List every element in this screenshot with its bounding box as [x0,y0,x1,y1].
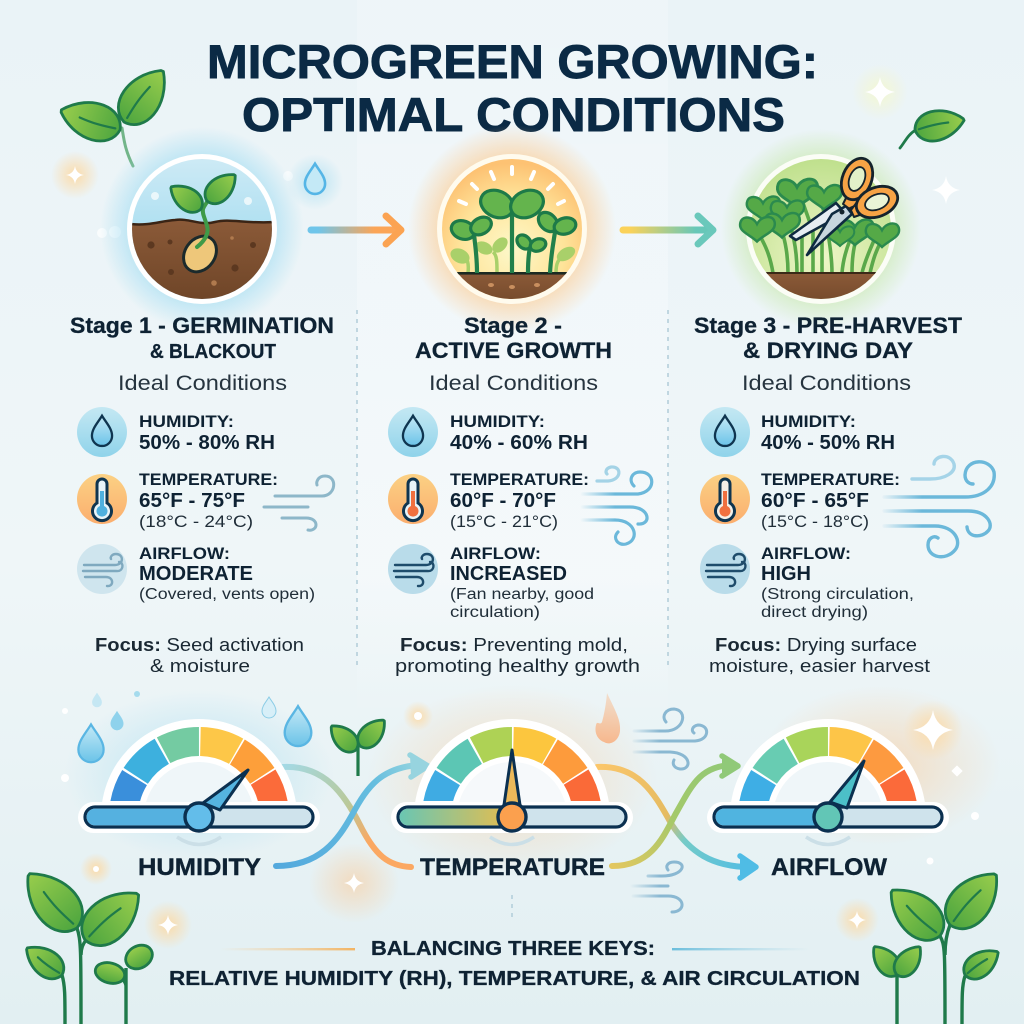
airflow values: circulation) [450,604,540,621]
icon: thermometer [77,474,127,524]
icon: humidity [700,407,750,457]
airflow values [139,544,315,603]
airflow values [450,544,594,621]
airflow values: AIRFLOW: [139,544,230,563]
plants: bottom right [866,861,1011,1024]
temperature values: 60°F - 65°F [761,490,869,512]
focus text [709,635,930,676]
footer rule right [672,948,810,950]
humidity values: HUMIDITY: [450,412,545,431]
icon: top left leaves [55,60,178,166]
subheading: Ideal Conditions [118,372,287,395]
icon: wind decoration [884,456,994,557]
temperature values: TEMPERATURE: [139,470,278,489]
panel: stage 3 [694,313,994,676]
focus text: Focus: Seed activation [95,635,304,655]
sparkles [51,64,960,238]
gauge: humidity [78,719,320,846]
gauge: airflow [707,719,949,846]
icon: water drop top [287,154,343,210]
airflow values: AIRFLOW: [450,544,541,563]
humidity values: 40% - 50% RH [761,432,895,454]
heading: stage 2 [415,313,612,363]
heading: stage 3 [694,313,963,363]
gauge labels: TEMPERATURE [420,854,605,881]
temperature values: 60°F - 70°F [450,490,556,512]
title [207,35,818,141]
humidity values [450,412,588,454]
airflow values: AIRFLOW: [761,544,851,563]
heading: stage 2: Stage 2 - [464,313,562,338]
stage 2 illustration: seedlings [408,125,616,333]
icon: thermometer [700,474,750,524]
icon: thermometer [388,474,438,524]
temperature values [761,470,900,531]
airflow values: INCREASED [450,563,567,585]
sparkles around gauges [80,700,979,893]
gauge labels [138,854,887,881]
focus text: promoting healthy growth [395,656,640,676]
icon: airflow [388,544,438,594]
humidity values: 50% - 80% RH [139,432,275,454]
subheading: Ideal Conditions [742,372,911,395]
gauge glows [64,685,1000,923]
icon: flame [595,693,620,743]
heading: stage 1 [70,313,334,363]
title: OPTIMAL CONDITIONS [242,88,785,141]
airflow values: direct drying) [761,604,868,621]
gauge: temperature [391,719,633,846]
needle [504,750,520,805]
knob [498,803,526,831]
plants: bottom left [14,860,157,1024]
focus text [395,635,640,676]
temperature values: (15°C - 18°C) [761,512,869,531]
column dividers [357,310,668,920]
temperature values: TEMPERATURE: [450,470,589,489]
seed [177,230,223,278]
focus text: Focus: Preventing mold, [400,635,628,655]
needle [203,770,248,810]
knob [185,803,213,831]
icon: wind below temperature gauge [626,862,682,912]
stage 1 illustration: seed sprouting [104,132,298,326]
panel: stage 2 [388,313,652,676]
panel: stage 1 [70,313,334,676]
knob [814,803,842,831]
temperature values: (15°C - 21°C) [450,512,558,531]
heading: stage 1: Stage 1 - GERMINATION [70,313,334,338]
connector: temperature to airflow flow lines [597,756,756,878]
icon: wind above temperature gauge [634,709,707,769]
temperature values [139,470,278,531]
icon: airflow [700,544,750,594]
heading: stage 1: & BLACKOUT [150,340,276,363]
icon: wind decoration [582,467,652,544]
arrow: stage 1 to 2 [311,216,401,244]
humidity values [761,412,895,454]
airflow values: MODERATE [139,563,253,585]
sparkles near plants [144,898,879,949]
temperature values: (18°C - 24°C) [139,512,253,531]
focus text: & moisture [150,656,250,676]
icon: wind decoration [264,476,334,530]
humidity values: HUMIDITY: [761,412,856,431]
icon: humidity [388,407,438,457]
footer text: BALANCING THREE KEYS: [371,938,655,960]
icon: humidity [77,407,127,457]
humidity values: HUMIDITY: [139,412,234,431]
airflow values [761,544,914,621]
icon: small sprout [325,714,392,776]
connector: humidity to temperature flow lines [276,755,428,867]
gauge labels: AIRFLOW [771,854,887,881]
heading: stage 3: Stage 3 - PRE-HARVEST [694,313,963,338]
arrow: stage 2 to 3 [623,216,713,244]
sprout [165,167,243,247]
humidity values [139,412,275,454]
temperature values: TEMPERATURE: [761,470,900,489]
focus text: moisture, easier harvest [709,656,930,676]
stage 3 illustration: harvest scissors [721,129,921,329]
airflow values: (Covered, vents open) [139,586,315,603]
footer text: RELATIVE HUMIDITY (RH), TEMPERATURE, & AIR CIRCULATION [169,968,860,990]
airflow values: (Fan nearby, good [450,586,594,603]
heading: stage 2: ACTIVE GROWTH [415,338,612,363]
heading: stage 3: & DRYING DAY [743,338,913,363]
focus text: Focus: Drying surface [715,635,917,655]
icon: airflow [77,544,127,594]
temperature values [450,470,589,531]
footer [169,938,860,990]
airflow values: HIGH [761,563,811,585]
subheading: Ideal Conditions [429,372,598,395]
icons: water drops [61,691,311,782]
temperature values: 65°F - 75°F [139,490,245,512]
icon: top right leaf [900,106,967,148]
needle [830,761,864,808]
humidity values: 40% - 60% RH [450,432,588,454]
gauge labels: HUMIDITY [138,854,261,881]
footer rule left [220,948,355,950]
footer text [169,938,860,990]
focus text [95,635,304,676]
title: MICROGREEN GROWING: [207,35,818,88]
scissors [790,154,902,255]
airflow values: (Strong circulation, [761,586,914,603]
